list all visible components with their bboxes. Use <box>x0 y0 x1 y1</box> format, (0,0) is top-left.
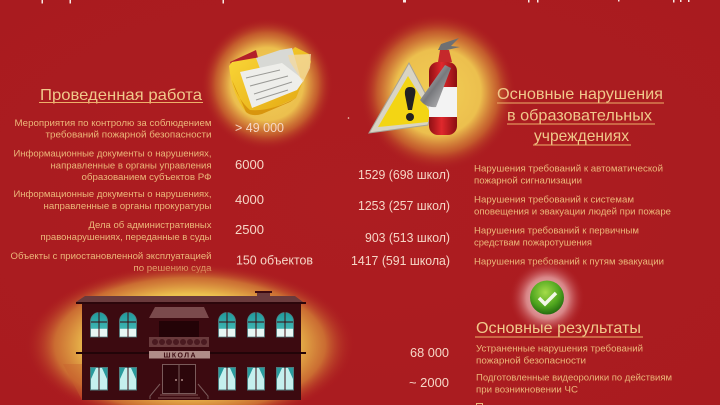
list: completed work descriptions: по решению суда <box>134 263 212 274</box>
balcony <box>149 307 209 318</box>
list: result descriptions: Подготовленные видеоролики по действиям <box>476 372 672 384</box>
list: result descriptions: при возникновении ЧС <box>476 384 578 396</box>
list: completed work descriptions: Мероприятия по контролю за соблюдением <box>14 118 212 129</box>
list: completed work descriptions: Информационные документы о нарушениях, <box>14 189 212 200</box>
numbers: violations: 903 (513 школ) <box>365 230 450 245</box>
clipped next list line fragment <box>476 403 483 405</box>
list: completed work descriptions: направленные в органы управления <box>50 160 212 172</box>
numbers: results <box>409 345 449 390</box>
icon: document folder <box>229 47 311 115</box>
numbers: completed work: 150 объектов <box>236 252 313 268</box>
list: completed work descriptions: требований пожарной безопасности <box>46 130 212 140</box>
numbers: violations <box>351 167 450 268</box>
heading: main results: Основные результаты <box>476 320 641 337</box>
title fragments clipped at top edge <box>42 0 690 4</box>
heading: main violations: в образовательных <box>507 108 652 124</box>
door <box>162 364 196 394</box>
list: completed work descriptions <box>10 118 212 274</box>
numbers: violations: 1253 (257 школ) <box>358 198 450 213</box>
list: completed work descriptions: правонарушениях, переданные в суды <box>40 232 212 243</box>
icon glow: folder <box>201 18 333 150</box>
numbers: violations: 1529 (698 школ) <box>358 167 450 182</box>
illustration: school building: ШКОЛА <box>164 352 196 360</box>
icon glow: extinguisher <box>360 14 516 170</box>
list: violation descriptions: Нарушения требований к первичным <box>474 226 639 236</box>
numbers: violations: 1417 (591 школа) <box>351 253 450 268</box>
icon: green check mark ball <box>530 280 564 314</box>
list: violation descriptions <box>474 164 671 268</box>
list: result descriptions <box>476 344 672 396</box>
list: violation descriptions: оповещения и эвакуации людей при пожаре <box>474 206 671 218</box>
list: violation descriptions: средствам пожаротушения <box>474 238 592 248</box>
list: completed work descriptions: направленные в органы прокуратуры <box>44 201 212 212</box>
numbers: completed work: 4000 <box>235 192 264 207</box>
shadow wedge beside school <box>63 364 82 400</box>
numbers: completed work: 2500 <box>235 222 264 237</box>
numbers: completed work <box>235 120 313 268</box>
list: violation descriptions: Нарушения требований к путям эвакуации <box>474 256 664 268</box>
list: completed work descriptions: Объекты с приостановленной эксплуатацией <box>10 251 212 262</box>
numbers: completed work: 6000 <box>235 157 264 172</box>
illustration: school building <box>76 291 306 400</box>
small dot <box>348 117 349 119</box>
list: completed work descriptions: Дела об административных <box>88 220 212 231</box>
icon: warning triangle and fire extinguisher <box>369 38 460 135</box>
heading: main violations: учреждениях <box>534 128 629 145</box>
list: violation descriptions: Нарушения требований к автоматической <box>474 164 663 174</box>
icon glow: check mark <box>509 260 585 336</box>
heading: main violations <box>497 86 664 145</box>
school sign <box>149 351 210 358</box>
numbers: results: 68 000 <box>410 345 449 360</box>
numbers: completed work: > 49 000 <box>235 120 284 135</box>
upper arched windows <box>90 312 294 337</box>
list: completed work descriptions: образованием субъектов РФ <box>82 172 212 183</box>
numbers: results: ~ 2000 <box>409 375 449 390</box>
list: result descriptions: пожарной безопасности <box>476 356 586 366</box>
lower windows <box>90 368 294 390</box>
list: result descriptions: Устраненные нарушения требований <box>476 344 643 354</box>
list: violation descriptions: Нарушения требований к системам <box>474 194 634 206</box>
heading: completed work: Проведенная работа <box>40 87 202 104</box>
icon glow: school <box>25 263 355 405</box>
heading: main violations: Основные нарушения <box>497 86 663 103</box>
list: completed work descriptions: Информационные документы о нарушениях, <box>14 148 212 160</box>
list: violation descriptions: пожарной сигнализации <box>474 176 582 186</box>
